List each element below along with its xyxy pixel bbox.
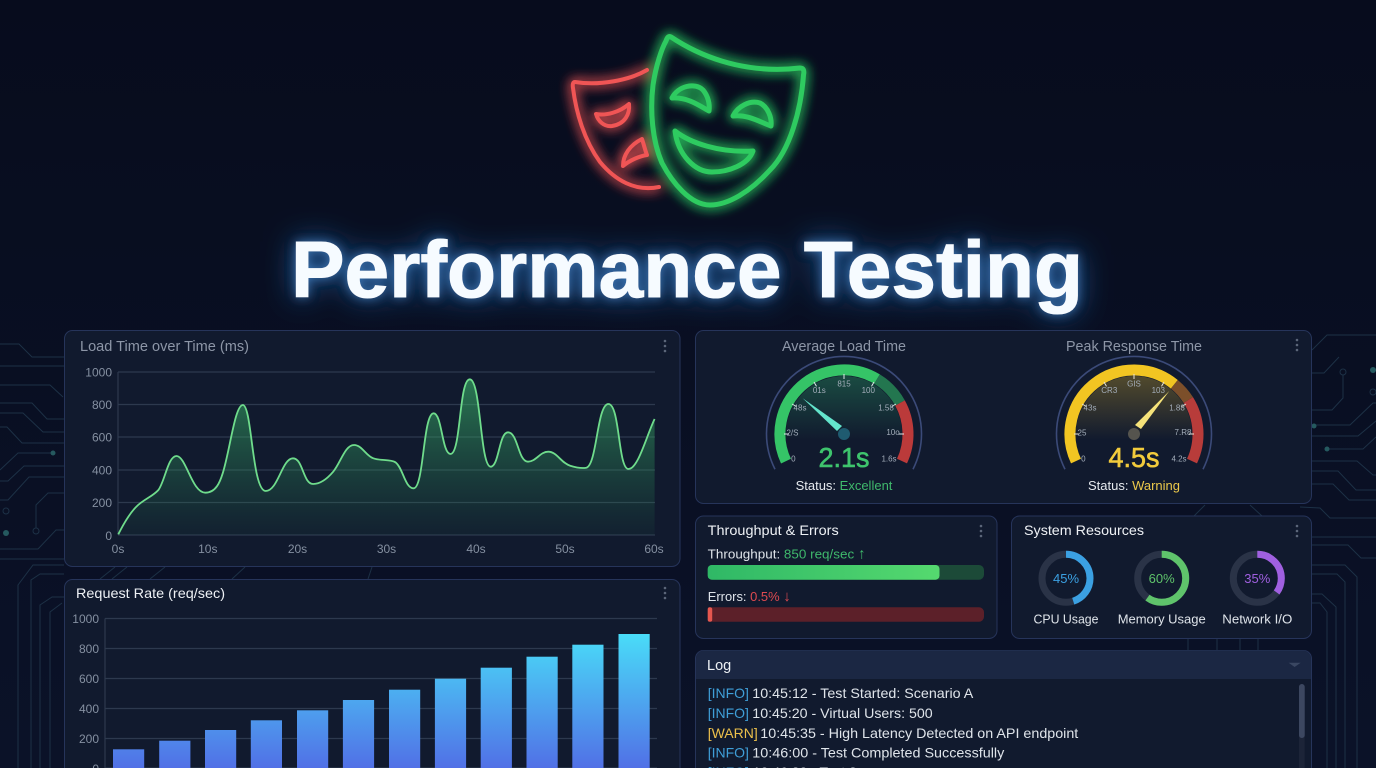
- value: 2.1s: [818, 442, 870, 473]
- icon: menu dots: [1296, 339, 1298, 351]
- log line 3: [WARN]: [708, 725, 758, 741]
- background circuit traces: left: [0, 344, 64, 768]
- area fill: [118, 379, 655, 535]
- gauge needle: [803, 398, 842, 431]
- y axis labels: 400: [79, 702, 99, 716]
- icon: menu dots: [664, 587, 666, 599]
- x axis labels: 20s: [288, 542, 307, 556]
- y axis labels: 600: [92, 430, 112, 444]
- donut: network IO: 35%: [1244, 571, 1271, 586]
- gauge scale labels: 48s: [794, 404, 806, 413]
- background circuit traces: between panels: [100, 505, 1262, 650]
- errors label: Errors: 0.5% ↓: [708, 588, 791, 605]
- y axis labels: 0: [105, 529, 112, 543]
- panel: log: [696, 650, 1312, 768]
- gauge scale labels: 01s: [813, 386, 826, 395]
- status: Status: Excellent: [796, 478, 893, 493]
- errors bar: [708, 607, 984, 622]
- log text 1: 10:45:12 - Test Started: Scenario A: [752, 685, 974, 701]
- icon: red sad mask: [573, 70, 659, 188]
- donut: memory usage: 60%: [1149, 571, 1175, 586]
- icon: menu dots: [664, 340, 666, 352]
- gauge arc segments: [1070, 370, 1198, 461]
- log line 2: [INFO]: [708, 705, 749, 721]
- gauge arc segments: [780, 370, 908, 461]
- log text 3: 10:45:35 - High Latency Detected on API endpoint: [760, 725, 1078, 741]
- donut: memory usage: Memory Usage: [1118, 612, 1206, 626]
- panel: throughput and errors: [696, 516, 997, 638]
- gauge scale labels: 4.2s: [1171, 454, 1187, 463]
- icon: collapse chevron: [1289, 663, 1301, 667]
- log text 4: 10:46:00 - Test Completed Successfully: [752, 744, 1004, 760]
- gauge scale labels: 1.58: [878, 404, 894, 413]
- heading: request rate: Request Rate (req/sec): [76, 585, 225, 601]
- donut: CPU usage: CPU Usage: [1034, 612, 1098, 626]
- y axis labels: [85, 366, 112, 543]
- bars: [113, 634, 650, 768]
- x axis labels: 50s: [555, 542, 575, 556]
- x axis labels: 30s: [377, 542, 396, 556]
- gauge scale labels: 2/S: [786, 429, 799, 438]
- gauge scale labels: 1.6s: [881, 454, 897, 463]
- y axis labels: 800: [79, 642, 99, 656]
- y axis labels: 1000: [85, 366, 112, 380]
- gauge scale labels: CR3: [1101, 386, 1118, 395]
- gauge scale labels: 25: [1078, 429, 1087, 438]
- log line 4: [INFO]: [708, 744, 749, 760]
- panel: gauges: [696, 330, 1312, 504]
- y axis labels: 200: [79, 732, 99, 746]
- panel: load time line chart: [64, 330, 680, 566]
- gauge scale labels: 7.R8: [1175, 428, 1192, 437]
- scrollbar: [1299, 684, 1305, 768]
- x axis labels: 60s: [644, 542, 664, 556]
- donut: memory usage: [1118, 554, 1206, 626]
- heading: system resources: System Resources: [1024, 522, 1144, 538]
- gauge scale labels: [786, 379, 900, 463]
- heading: throughput and errors: Throughput & Errors: [708, 522, 839, 538]
- status: Status: Warning: [1088, 478, 1180, 493]
- throughput bar: [708, 565, 984, 580]
- gauge scale labels: 815: [837, 379, 851, 388]
- panel: request rate bar chart: [64, 580, 680, 768]
- x axis labels: 40s: [466, 542, 486, 556]
- heading: peak response time: Peak Response Time: [1066, 339, 1202, 355]
- x axis labels: 0s: [112, 542, 124, 556]
- donut: network IO: Network I/O: [1222, 612, 1292, 626]
- gauge scale labels: 103: [1152, 386, 1166, 395]
- gauge scale labels: 10o: [886, 428, 900, 437]
- gauge scale labels: 0: [1081, 454, 1086, 463]
- gauge: peak response time: [1056, 339, 1212, 493]
- gauge scale labels: 1.88: [1169, 404, 1185, 413]
- gauge scale labels: 100: [862, 386, 876, 395]
- log header bar: [696, 650, 1311, 679]
- y axis labels: 600: [79, 672, 99, 686]
- heading: average load time: Average Load Time: [782, 339, 906, 355]
- value: 4.5s: [1108, 442, 1160, 473]
- title: Performance Testing: [291, 225, 1083, 314]
- panel: system resources: [1012, 516, 1312, 638]
- grid lines: [105, 618, 657, 768]
- icon: menu dots: [1296, 525, 1298, 537]
- x axis labels: [112, 542, 664, 556]
- icon: menu dots: [980, 525, 982, 537]
- log line 1: [INFO]: [708, 685, 749, 701]
- gauge scale labels: 0: [791, 454, 796, 463]
- y axis labels: 800: [92, 398, 112, 412]
- donut: CPU usage: 45%: [1053, 571, 1079, 586]
- load time line: [118, 379, 655, 534]
- gauge scale labels: 43s: [1084, 404, 1096, 413]
- heading: load time: Load Time over Time (ms): [80, 339, 249, 355]
- throughput label: Throughput: 850 req/sec ↑: [708, 546, 866, 562]
- gauge: average load time: [766, 339, 922, 493]
- y axis labels: [72, 612, 99, 768]
- icon: green happy mask: [652, 36, 804, 205]
- y axis labels: 200: [92, 496, 112, 510]
- icon: theatre masks: [573, 36, 804, 205]
- background circuit traces: right: [1300, 335, 1376, 768]
- grid lines: [118, 372, 655, 535]
- donut: CPU usage: [1034, 554, 1098, 626]
- x axis labels: 10s: [198, 542, 217, 556]
- donut: network IO: [1222, 554, 1292, 626]
- heading: log: Log: [707, 658, 731, 674]
- gauge needle: [1135, 391, 1169, 429]
- y axis labels: 1000: [72, 612, 99, 626]
- log text 2: 10:45:20 - Virtual Users: 500: [752, 705, 933, 721]
- y axis labels: 400: [92, 464, 112, 478]
- gauge scale labels: [1078, 379, 1192, 463]
- gauge scale labels: GIS: [1127, 379, 1141, 388]
